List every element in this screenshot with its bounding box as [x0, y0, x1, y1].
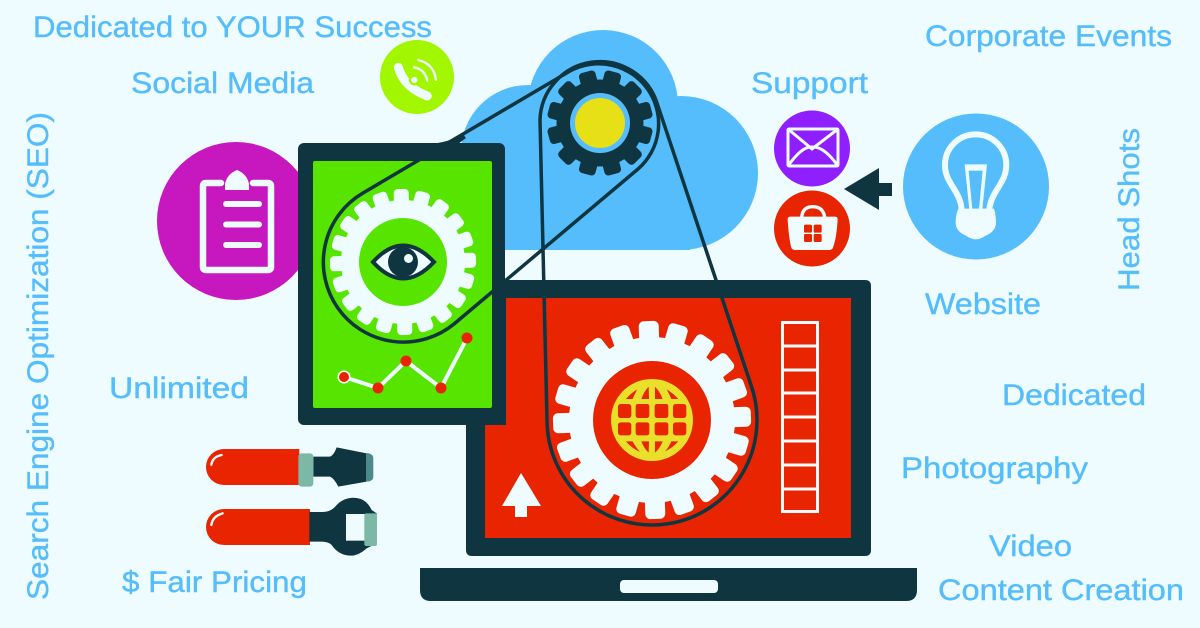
icon: globe — [611, 379, 693, 461]
laptop screen — [485, 298, 851, 538]
tablet gear — [330, 189, 476, 335]
text: Search Engine Optimization (SEO) (vertical): Search Engine Optimization (SEO) — [22, 112, 55, 600]
icon: screwdriver — [206, 447, 373, 487]
text: Website: Website — [925, 288, 1041, 321]
text: Dedicated: Dedicated — [1002, 379, 1146, 412]
arrow pointing left — [844, 168, 892, 210]
cloud gear — [547, 70, 653, 176]
icon: light bulb circle — [903, 114, 1049, 260]
cloud — [461, 30, 758, 250]
icon: purple envelope circle — [774, 110, 850, 186]
icon: lime phone circle — [380, 40, 454, 114]
text: Social Media: Social Media — [131, 67, 315, 100]
text: Dedicated to YOUR Success: Dedicated to YOUR Success — [33, 11, 432, 44]
line chart — [338, 332, 472, 394]
tablet screen — [313, 161, 492, 408]
scale ladder — [782, 322, 818, 512]
icon: wrench — [206, 498, 377, 556]
icon: eye — [373, 246, 434, 278]
text: $ Fair Pricing: $ Fair Pricing — [122, 566, 307, 599]
base notch — [620, 580, 718, 593]
icon: magenta clipboard circle — [157, 142, 315, 300]
laptop — [420, 280, 917, 601]
belt: laptop to cloud — [540, 62, 757, 525]
tablet — [298, 134, 505, 425]
up arrow — [502, 473, 541, 517]
text: Photography: Photography — [901, 452, 1088, 485]
text: Head Shots (vertical): Head Shots — [1113, 128, 1146, 291]
text: Unlimited: Unlimited — [109, 372, 249, 405]
laptop lid — [466, 280, 871, 556]
laptop base — [420, 568, 917, 601]
text: Video: Video — [989, 530, 1072, 563]
text: Content Creation: Content Creation — [938, 574, 1184, 607]
tablet corner fillet — [428, 134, 466, 144]
belt: tablet to cloud — [323, 64, 659, 342]
text: Support: Support — [751, 67, 868, 100]
icon: red basket circle — [774, 190, 850, 266]
laptop gear — [553, 321, 751, 519]
text: Corporate Events: Corporate Events — [925, 20, 1172, 53]
